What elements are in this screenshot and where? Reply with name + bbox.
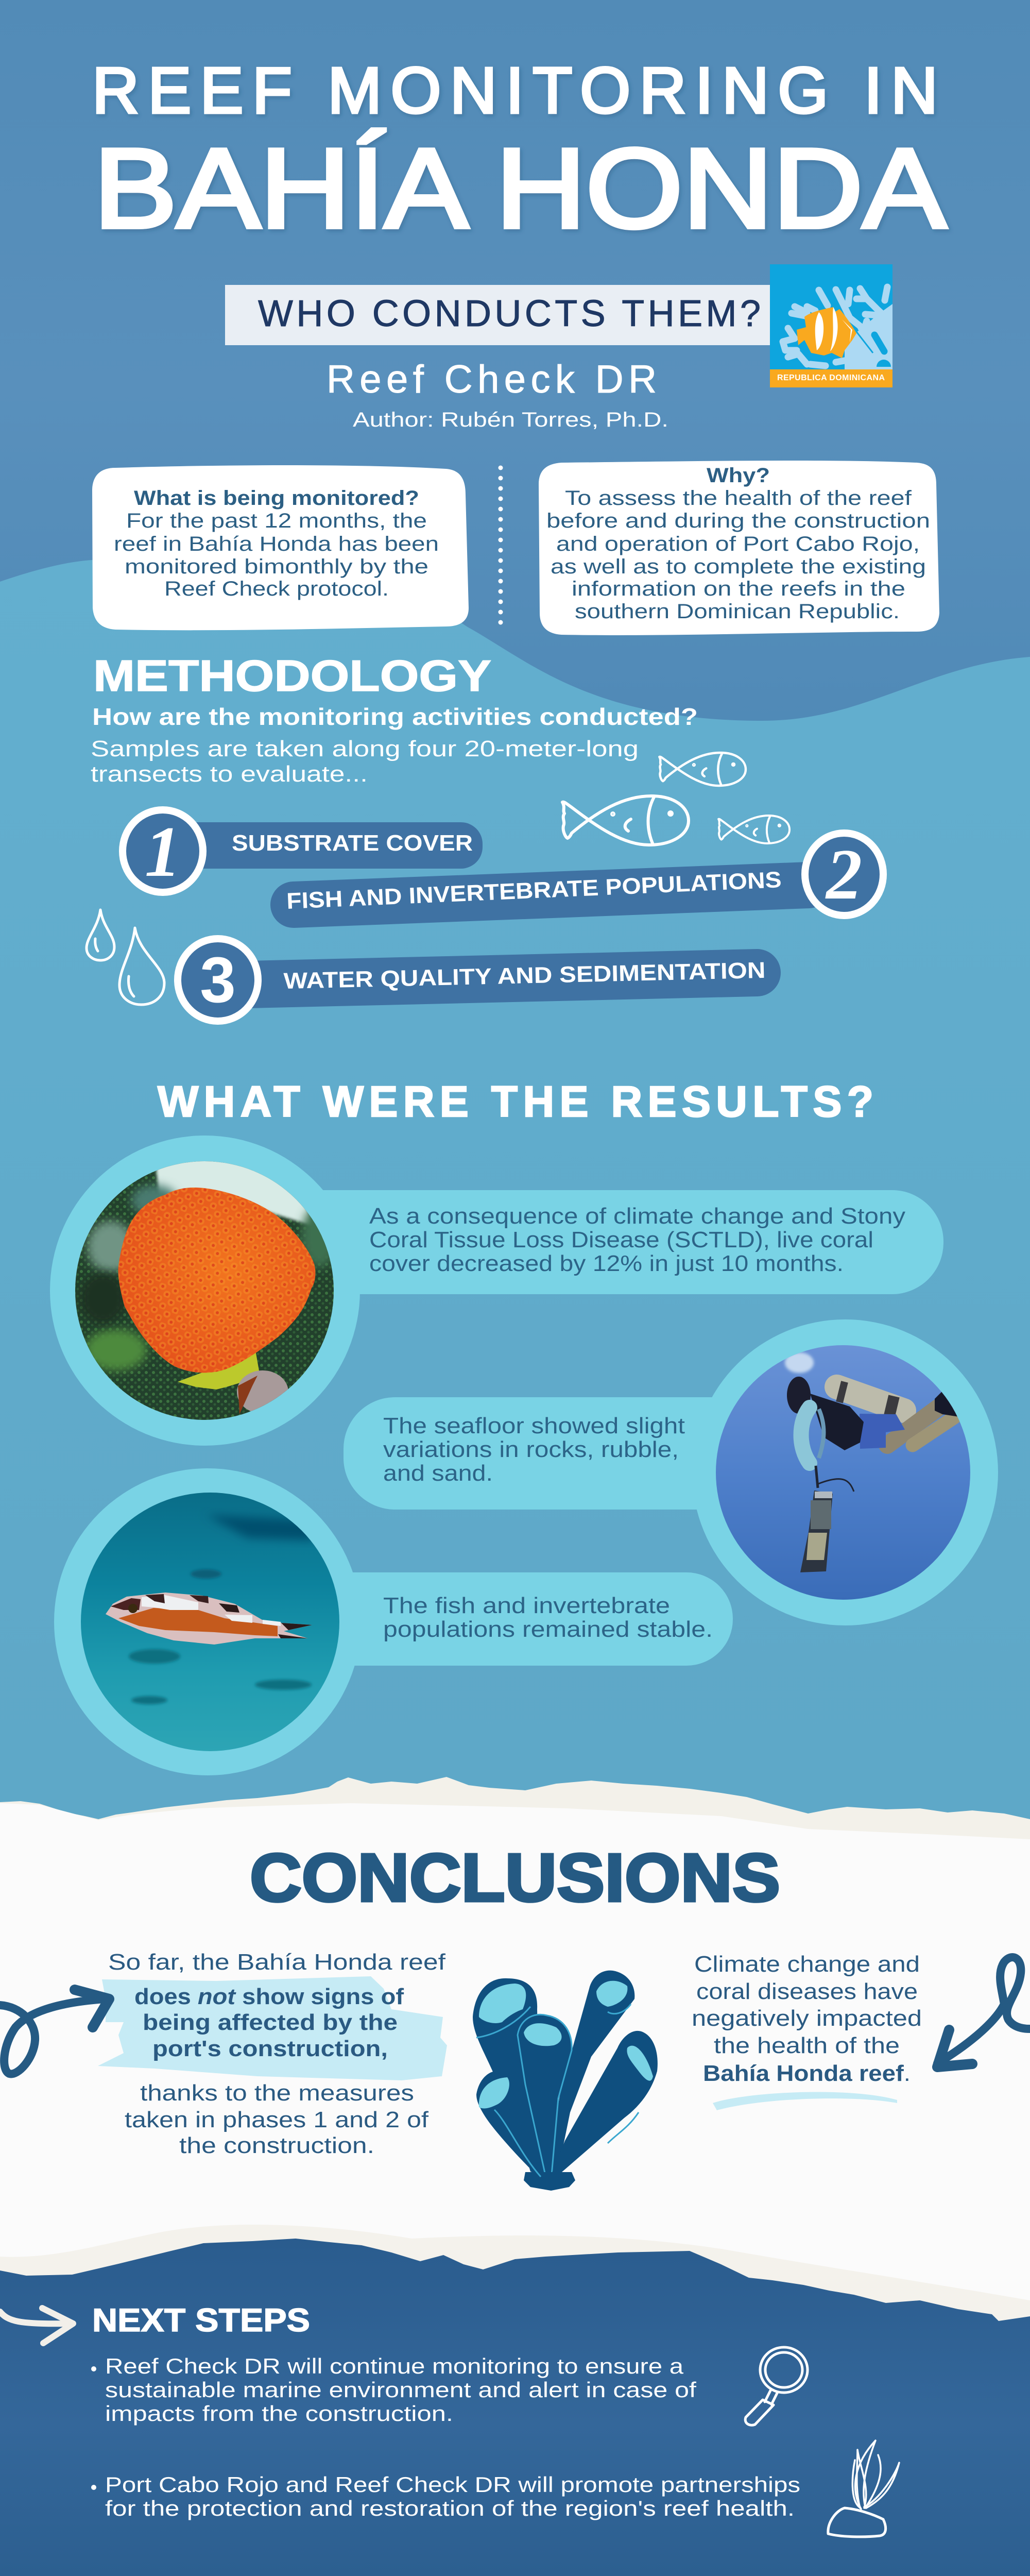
bullet 1: impacts from the construction. [105,2401,453,2426]
icon: seaweed on rock [828,2441,899,2537]
step 2: fish and invertebrate populations [286,833,883,916]
methodology intro text: transects to evaluate... [91,761,368,787]
bullet 1: Reef Check DR will continue monitoring to ensure a [105,2354,684,2378]
heading: conclusions: CONCLUSIONS [250,1840,780,1916]
step 1: substrate cover [123,810,483,892]
result 2 text: and sand. [383,1461,493,1486]
banner: who conducts them [225,285,770,345]
bullet 2: for the protection and restoration of the region's reef health. [105,2496,795,2520]
result 2: diver [344,1319,998,1625]
icon: tube sponge [473,1971,658,2191]
panel: what is being monitored [92,465,469,630]
heading: methodology: METHODOLOGY [93,652,491,701]
white torn paper section [0,1777,1030,2370]
step 2: fish and invertebrate populations: 2 [825,835,862,914]
banner: who conducts them: WHO CONDUCTS THEM? [258,293,761,334]
result 1 text: As a consequence of climate change and Stony [369,1204,905,1229]
panel: why: and operation of Port Cabo Rojo, [556,533,920,555]
background: top paper section [0,0,1030,773]
step 2: fish and invertebrate populations: FISH AND INVERTEBRATE POPULATIONS [286,867,782,914]
panel: what is being monitored: For the past 12 months, the [126,510,427,532]
panel: what is being monitored: reef in Bahía Honda has been [114,533,439,555]
logo fish [797,307,856,358]
text: conclusion left: being affected by the [143,2010,398,2035]
text: conclusion right: negatively impacted [692,2006,922,2031]
text: conclusion left: So far, the Bahía Honda reef [108,1950,446,1975]
icon: water drops [87,910,164,1005]
panel: what is being monitored: Reef Check protocol. [164,578,389,600]
title: REEF MONITORING IN [92,54,938,127]
heading: results: WHAT WERE THE RESULTS? [158,1077,873,1126]
text: conclusion left: port's construction, [152,2036,388,2061]
result 1 text: cover decreased by 12% in just 10 months. [369,1251,844,1276]
background: light blue wave [0,553,1030,1906]
arrow: next steps [0,2308,73,2343]
icon: fish small [718,816,789,843]
photo: reef fish [81,1493,339,1751]
text: conclusion right [692,1952,922,2086]
panel: why: Why? [707,464,770,487]
panel: why: as well as to complete the existing [551,555,926,578]
result 2 text [383,1413,685,1486]
panel: why [539,461,939,635]
icon: fish top [659,753,746,786]
result 3 text [383,1593,713,1642]
result 1 text [369,1204,905,1276]
arrow: right curl [937,1957,1030,2067]
text: conclusion left: the construction. [179,2133,374,2158]
text: conclusion right: coral diseases have [696,1979,918,2004]
panel: next steps [0,2225,1030,2576]
dark torn section [0,2239,1030,2576]
dotted divider [499,466,503,624]
step 3: water quality and sedimentation: 3 [200,944,236,1016]
result 2 text: The seafloor showed slight [383,1413,685,1438]
panel: what is being monitored: What is being monitored? [134,487,419,510]
title [92,54,946,251]
text: conclusion left: taken in phases 1 and 2 of [125,2107,429,2132]
heading: next steps: NEXT STEPS [92,2302,310,2338]
underline brush [713,2092,897,2110]
panel: why: southern Dominican Republic. [575,600,900,623]
step 3: water quality and sedimentation [178,939,766,1021]
result 1 text: Coral Tissue Loss Disease (SCTLD), live coral [369,1227,873,1252]
panel: what is being monitored: monitored bimonthly by the [125,555,428,578]
methodology intro text: Samples are taken along four 20-meter-long [91,736,639,761]
arrow: left curl [0,1990,109,2074]
icon: fish large [562,796,689,845]
methodology intro text [91,703,698,787]
photo: diver [715,1345,971,1601]
result 2 text: variations in rocks, rubble, [383,1437,679,1462]
bullet 2: Port Cabo Rojo and Reef Check DR will promote partnerships [105,2472,800,2497]
result 1: coral [50,1136,943,1446]
panel: why: information on the reefs in the [572,578,905,600]
logo: Reef Check Republica Dominicana: REPUBLICA DOMINICANA [777,374,885,382]
bullet 1: sustainable marine environment and alert in case of [105,2378,696,2402]
result 3 text: populations remained stable. [383,1617,713,1642]
subtitle: organisation: Reef Check DR [327,358,657,401]
author line: Author: Rubén Torres, Ph.D. [353,409,668,431]
result 3 text: The fish and invertebrate [383,1593,670,1618]
paper fringe above dark section [0,2225,1030,2324]
icon: magnifying glass [745,2347,808,2425]
text: conclusion left [108,1950,446,2158]
text: conclusion right: Bahía Honda reef . [703,2061,911,2086]
methodology intro text: How are the monitoring activities conducted? [92,703,698,730]
panel: why: before and during the construction [546,510,930,532]
text: conclusion left: does not show signs of [134,1984,404,2009]
result 3: fish photo [54,1468,733,1775]
step 1: substrate cover: 1 [145,812,181,892]
text: conclusion right: Climate change and [694,1952,920,1977]
title: BAHÍA HONDA [94,126,946,251]
photo: orange coral [75,1154,337,1420]
text: conclusion right: the health of the [714,2033,900,2058]
bullet 2 [91,2472,800,2520]
highlight brush [98,1976,447,2080]
text: conclusion left: thanks to the measures [140,2080,414,2106]
step 3: water quality and sedimentation: WATER QUALITY AND SEDIMENTATION [283,958,766,994]
bullet 1 [91,2354,696,2426]
panel: why: To assess the health of the reef [565,487,912,510]
logo: Reef Check Republica Dominicana [770,264,892,387]
step 1: substrate cover: SUBSTRATE COVER [232,831,473,856]
